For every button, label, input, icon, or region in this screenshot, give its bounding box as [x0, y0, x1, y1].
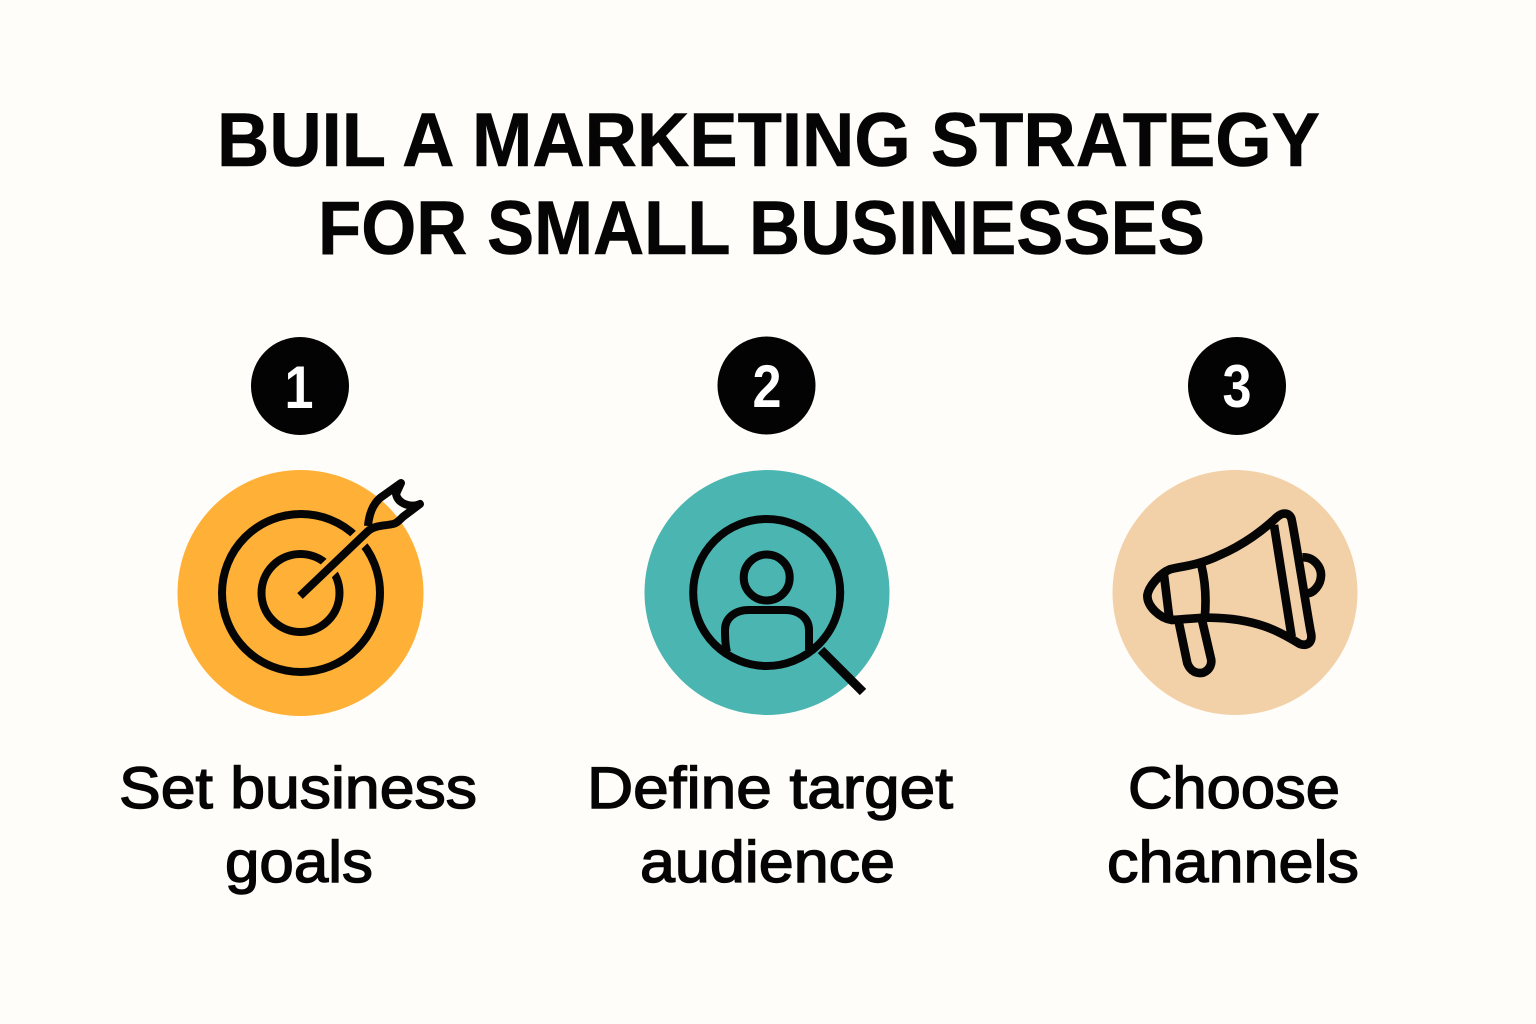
label: define target audience: audience	[640, 830, 895, 895]
label: define target audience	[587, 756, 953, 895]
icon: megaphone	[1112, 470, 1358, 715]
number badge 1	[251, 337, 349, 435]
panel: step 2 define target audience	[587, 336, 953, 895]
icon: target with arrow	[178, 470, 424, 716]
title: BUIL A MARKETING STRATEGY	[217, 98, 1320, 183]
number badge 3	[1188, 337, 1286, 435]
panel: step 3 choose channels	[1107, 337, 1359, 895]
number badge 2	[718, 336, 816, 434]
icon: magnifier with person	[644, 470, 890, 715]
number badge 2: 2	[752, 353, 782, 420]
label: set business goals: Set business	[119, 756, 477, 821]
label: choose channels: channels	[1107, 830, 1359, 895]
title	[217, 98, 1320, 271]
title: FOR SMALL BUSINESSES	[318, 186, 1205, 271]
panel: step 1 set business goals	[119, 337, 477, 895]
label: choose channels	[1107, 756, 1359, 895]
label: set business goals: goals	[225, 830, 373, 895]
number badge 1: 1	[284, 354, 314, 421]
number badge 3: 3	[1222, 353, 1252, 420]
label: choose channels: Choose	[1128, 756, 1340, 821]
label: set business goals	[119, 756, 477, 895]
label: define target audience: Define target	[587, 756, 953, 821]
